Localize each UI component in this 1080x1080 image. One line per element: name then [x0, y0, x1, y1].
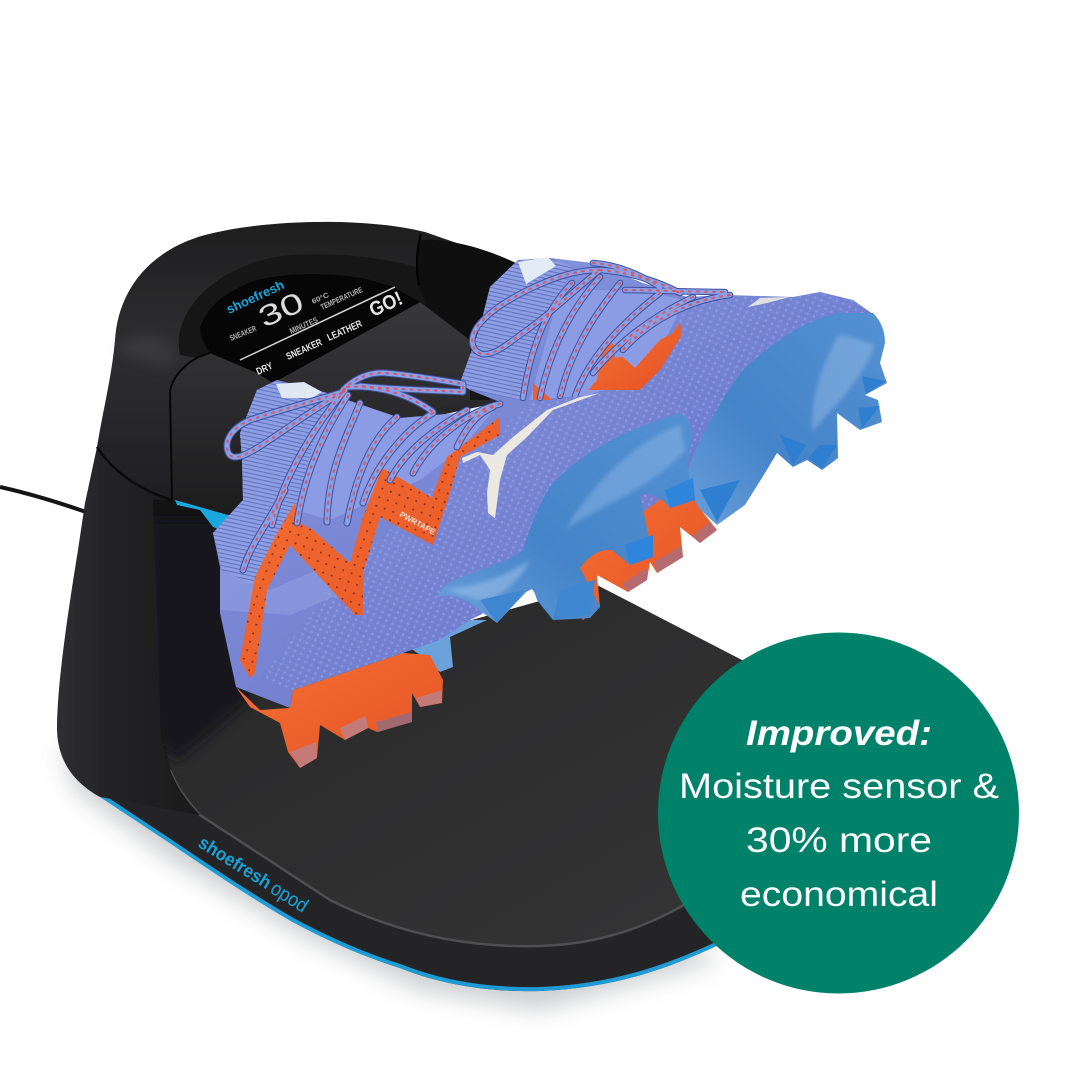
callout line 3: economical: [740, 875, 938, 914]
wall shading: [150, 520, 250, 760]
back shoe collar knit: [460, 258, 573, 400]
ring right side: [416, 240, 520, 405]
toe cleat: [390, 620, 487, 672]
callout line 2: 30% more: [746, 821, 932, 860]
collar knit: [213, 380, 327, 590]
heel stud tips: [290, 690, 442, 768]
ring highlight: [118, 335, 175, 368]
front shoe logo stripe: [462, 393, 600, 518]
device: plate: [150, 520, 800, 946]
base wordmark: [195, 832, 312, 917]
back shoe cleat tips: [700, 376, 886, 522]
sole cleat tips: [480, 478, 695, 623]
back shoe logo: [748, 297, 790, 307]
back shoe orange stripe: [588, 322, 682, 390]
model text: PWRTAPE: [398, 510, 437, 537]
tongue: [295, 393, 500, 520]
back shoe tongue: [530, 290, 685, 400]
device: base: [90, 690, 745, 991]
front shoe tab: [276, 382, 322, 398]
callout line 1: Moisture sensor &: [679, 767, 999, 806]
callout heading: Improved:: [746, 714, 932, 753]
callout: improved: [658, 632, 1019, 994]
front shoe sole plate: [437, 413, 695, 623]
back shoe laces: [472, 263, 730, 398]
back shoe sole plate: [687, 313, 887, 525]
display labels: MINUTES: [288, 315, 320, 336]
display labels: GO!: [366, 288, 406, 322]
soft shadow: [60, 745, 720, 1010]
power cable: [0, 487, 86, 512]
screen logo: shoefresh: [224, 277, 287, 317]
display labels: 60°C: [311, 291, 330, 306]
base wordmark: opod: [266, 878, 312, 917]
stud tips: [578, 522, 717, 620]
orange lightning stripe: [240, 417, 500, 678]
heel plate: [236, 653, 443, 768]
back shoe tab: [518, 257, 556, 284]
back shoe: [460, 257, 887, 525]
display labels: [228, 285, 406, 378]
back shoe upper: [460, 258, 873, 480]
cyan accent: [175, 500, 235, 535]
device: head ring: [97, 222, 520, 535]
front shoe upper: [213, 380, 690, 708]
front block: [170, 302, 470, 525]
display labels: LEATHER: [326, 318, 365, 344]
front shoe: [213, 373, 717, 768]
base blue light strip: [96, 792, 745, 989]
timer value: 30: [254, 286, 309, 334]
front shoe laces: [227, 373, 500, 570]
base wordmark: shoefresh: [195, 832, 276, 893]
device: tower: [57, 447, 200, 815]
display labels: TEMPERATURE: [319, 285, 364, 312]
display labels: SNEAKER: [285, 337, 324, 363]
heel band: [220, 560, 350, 615]
display labels: DRY: [255, 361, 275, 378]
display labels: SNEAKER: [228, 324, 258, 343]
ring inner recess: [179, 254, 490, 400]
device: back wall: [140, 490, 270, 815]
orange cleats: [570, 485, 717, 620]
display screen: [200, 274, 420, 383]
